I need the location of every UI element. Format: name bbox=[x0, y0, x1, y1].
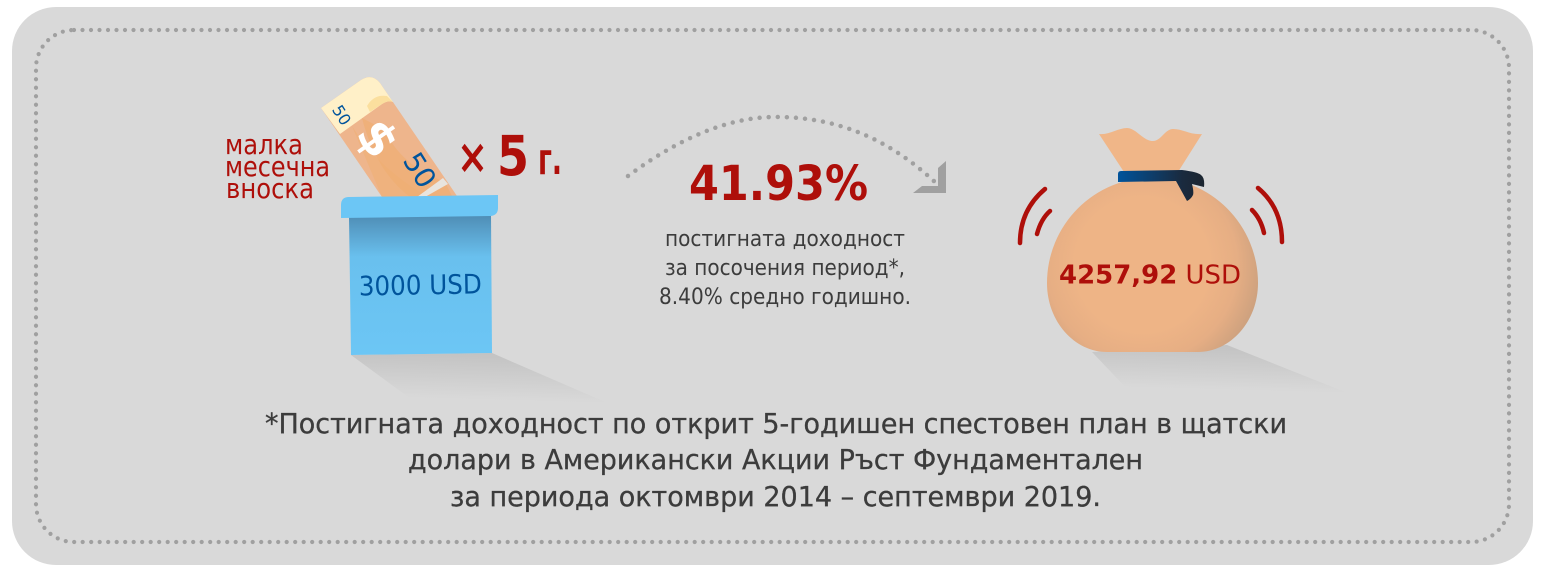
stat: total return: 41.93% bbox=[689, 156, 868, 212]
label: small monthly contribution bbox=[225, 128, 330, 205]
large 50 on banknote: 50 bbox=[396, 146, 443, 194]
label: small monthly contribution: малка bbox=[225, 128, 303, 161]
text: footnote: за периода октомври 2014 – септември 2019. bbox=[450, 481, 1101, 513]
text: return description: постигната доходност bbox=[665, 227, 905, 252]
box amount: 3000 USD bbox=[359, 269, 482, 302]
bag tie bbox=[1118, 170, 1204, 201]
text: return description: за посочения период*, bbox=[665, 256, 905, 281]
icon: dollar sign on banknote: $ bbox=[345, 109, 410, 168]
label: small monthly contribution: месечна bbox=[225, 150, 330, 183]
shadow: box bbox=[351, 353, 605, 402]
icon: contribution box bbox=[341, 195, 498, 355]
text: return description bbox=[659, 227, 911, 310]
bag amount: 4257,92 USD bbox=[1059, 260, 1241, 290]
label: times five years: г. bbox=[538, 134, 562, 185]
arrow: dotted arc bbox=[628, 117, 946, 193]
text: return description: 8.40% средно годишно. bbox=[659, 285, 911, 310]
label: times five years: × bbox=[457, 129, 488, 185]
label: times five years bbox=[457, 124, 562, 188]
text: footnote: *Постигната доходност по открит 5-годишен спестовен план в щатски bbox=[265, 408, 1287, 440]
text: footnote: долари в Американски Акции Ръст Фундаментален bbox=[408, 444, 1143, 476]
label: small monthly contribution: вноска bbox=[226, 172, 314, 205]
label: times five years: 5 bbox=[497, 124, 529, 188]
icon: shake lines bbox=[1020, 188, 1282, 243]
text: footnote bbox=[265, 408, 1287, 513]
small 50 on banknote: 50 bbox=[328, 102, 355, 129]
shadow: bag bbox=[1092, 345, 1345, 392]
icon: banknote bbox=[321, 77, 457, 197]
icon: money bag bbox=[1047, 128, 1258, 352]
